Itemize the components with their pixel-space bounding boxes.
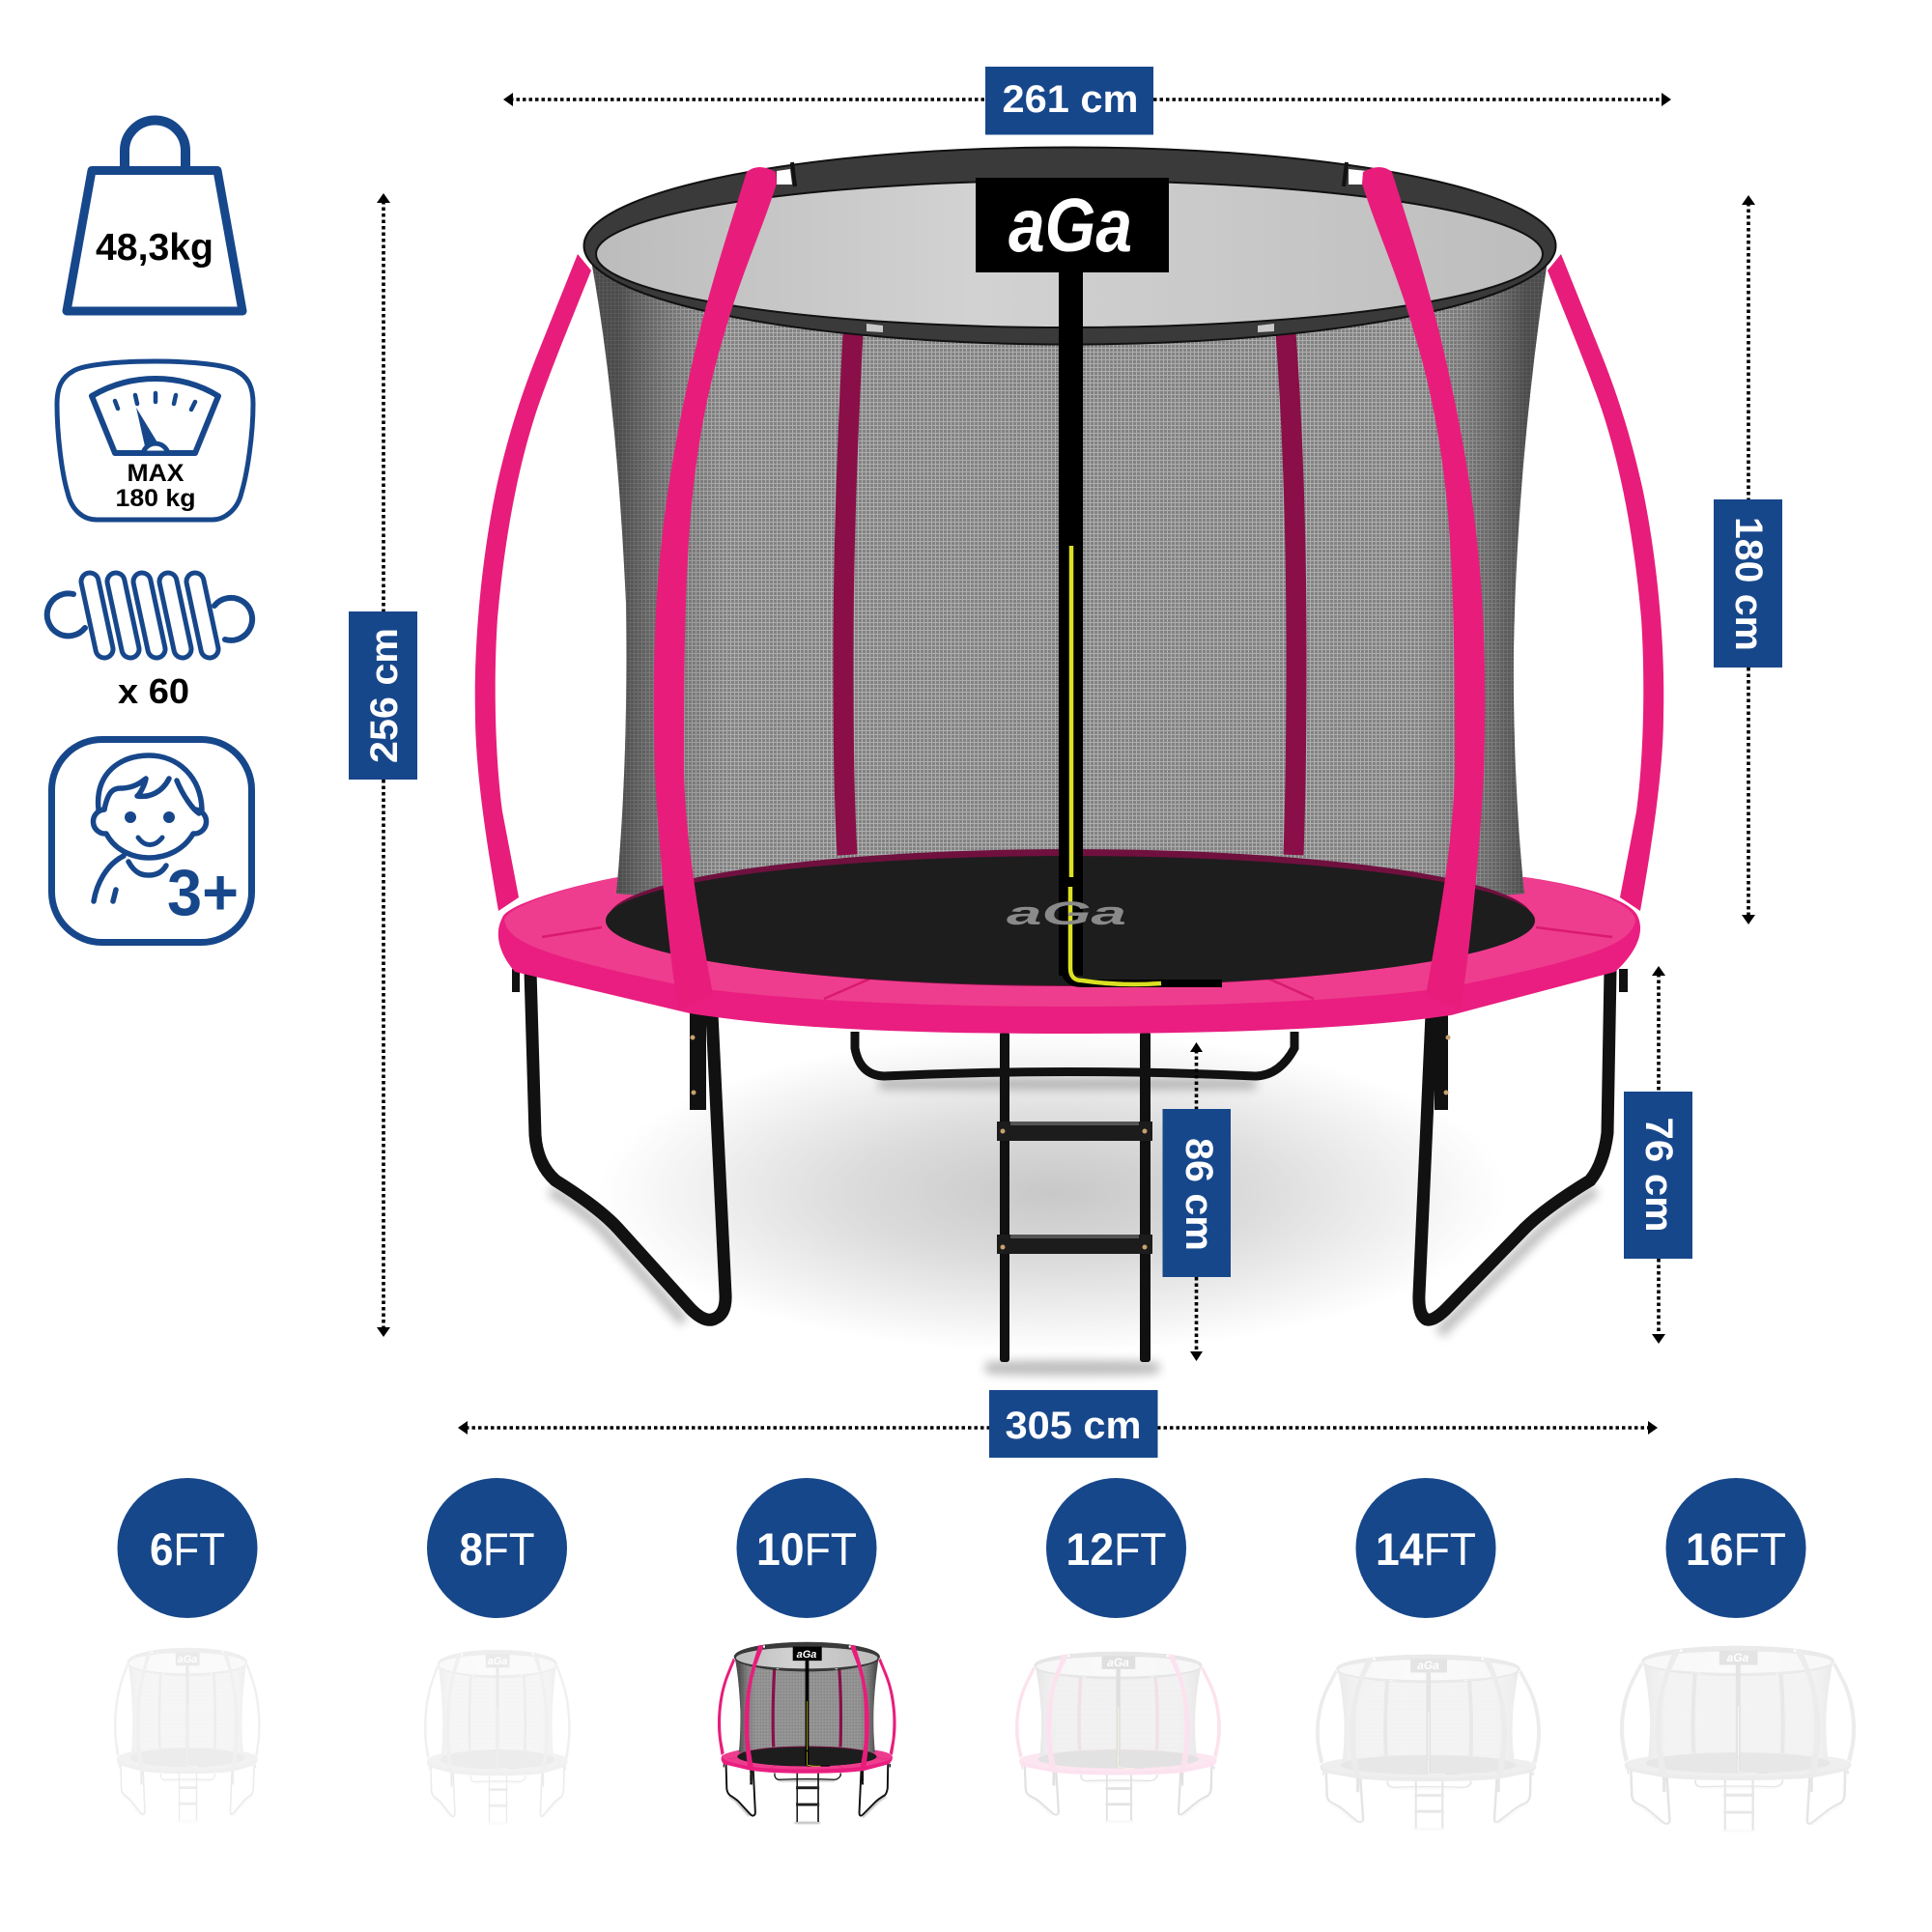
icon: child age 3+: 3+	[167, 856, 239, 929]
support bar	[855, 1032, 1294, 1076]
mat	[606, 849, 1535, 986]
thumbnail: 16FT ghost	[1620, 1646, 1856, 1832]
logo on mat: aGa	[1007, 895, 1126, 931]
size badge 12FT	[1046, 1478, 1186, 1618]
dimension: net height 180 cm: 180 cm	[1727, 517, 1770, 651]
dimension: leg height 76 cm	[1624, 966, 1692, 1344]
thumbnail: 8FT ghost	[424, 1650, 571, 1824]
size badge 6FT	[118, 1478, 257, 1618]
icon: max load scale	[57, 361, 253, 520]
size badge 8FT	[427, 1478, 567, 1618]
icon: weight 48,3 kg	[67, 121, 242, 311]
dimension: ladder height 86 cm	[1163, 1042, 1231, 1361]
size badge 14FT	[1356, 1478, 1495, 1618]
pad	[498, 877, 1640, 1034]
dimension: width 261 cm	[503, 67, 1671, 135]
size badge 10FT	[736, 1478, 877, 1618]
floor shadow	[599, 1034, 1507, 1352]
dimension: width 261 cm: 261 cm	[1003, 78, 1138, 121]
thumbnail: 10FT highlighted	[718, 1642, 896, 1823]
size badge 12FT: 12FT	[1066, 1523, 1167, 1575]
right leg	[1419, 969, 1628, 1320]
front poles and outer poles	[475, 167, 1663, 1010]
trampoline photo	[475, 147, 1663, 1370]
logo on net: aGa	[1009, 183, 1132, 268]
size badge 8FT: 8FT	[460, 1523, 535, 1575]
thumbnail: 12FT ghost pink: aGa	[1107, 1656, 1129, 1669]
left leg	[512, 969, 725, 1320]
rear poles	[843, 333, 1296, 855]
dimension: net height 180 cm	[1714, 195, 1782, 924]
ladder	[997, 1032, 1152, 1362]
dimension: diameter 305 cm	[458, 1390, 1658, 1458]
thumbnail: 14FT ghost: aGa	[1417, 1659, 1439, 1672]
icon: springs x 60	[47, 582, 252, 711]
dimension: diameter 305 cm: 305 cm	[1005, 1405, 1142, 1447]
icon: max load scale: MAX	[128, 460, 185, 487]
thumbnail: 6FT ghost	[114, 1648, 261, 1822]
dimension: leg height 76 cm: 76 cm	[1637, 1118, 1680, 1232]
net	[591, 261, 1548, 927]
thumbnail: 6FT ghost: aGa	[178, 1654, 197, 1665]
icon: springs x 60: x 60	[118, 671, 189, 711]
thumbnail: 12FT ghost pink	[1015, 1652, 1221, 1822]
yellow zipper	[1070, 546, 1161, 984]
thumbnail: 14FT ghost	[1316, 1655, 1541, 1830]
logo panel	[976, 178, 1222, 983]
dimension: ladder height 86 cm: 86 cm	[1178, 1138, 1220, 1251]
thumbnail: 10FT highlighted: aGa	[797, 1649, 816, 1661]
dimension: height 256 cm	[349, 193, 417, 1337]
icon: max load scale: 180 kg	[116, 485, 195, 512]
dimension: height 256 cm: 256 cm	[363, 628, 406, 763]
icon: child age 3+	[52, 740, 251, 943]
thumbnail: 16FT ghost: aGa	[1727, 1651, 1749, 1664]
thumbnail: 8FT ghost: aGa	[488, 1656, 507, 1667]
size badge 16FT	[1665, 1478, 1806, 1618]
size badge 14FT: 14FT	[1376, 1523, 1476, 1575]
size badge 10FT: 10FT	[756, 1523, 857, 1575]
leg shadows	[551, 1084, 1596, 1370]
size badge 16FT: 16FT	[1686, 1523, 1786, 1575]
size badge 6FT: 6FT	[150, 1523, 225, 1575]
top ring	[583, 147, 1556, 345]
icon: weight 48,3 kg: 48,3kg	[96, 227, 213, 269]
